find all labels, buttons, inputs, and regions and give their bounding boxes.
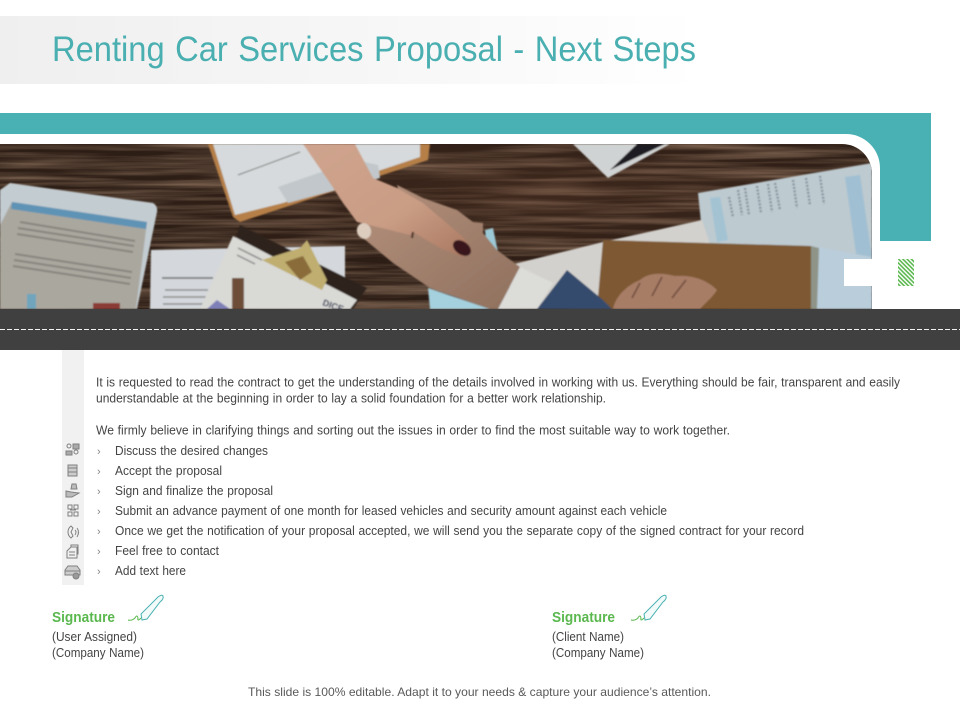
white note box (844, 259, 872, 286)
signature block: client: (Company Name) (552, 646, 644, 660)
next steps list (97, 444, 804, 578)
woman's arm (303, 144, 472, 257)
jacket sleeve (537, 270, 612, 309)
icon: grid (68, 505, 78, 516)
icon: hand with money (66, 484, 79, 497)
shirt cuff (498, 267, 553, 309)
next steps list: Discuss the desired changes (115, 444, 268, 458)
top clipboard (208, 144, 430, 222)
signature block: user (52, 595, 163, 660)
intro paragraph (96, 376, 901, 406)
next steps list: Once we get the notification of your proposal accepted, we will send you the separate copy of the signed contract for your record (115, 524, 804, 538)
icon: car (65, 566, 80, 579)
next steps list: Accept the proposal (115, 464, 222, 478)
icon: pen with squiggle (128, 595, 163, 620)
signature block: client: (Client Name) (552, 630, 624, 644)
next steps list: › (97, 546, 101, 558)
belief statement: We firmly believe in clarifying things and sorting out the issues in order to find the most suitable way to work together. (96, 424, 730, 438)
invoice clipboard (225, 225, 367, 309)
document stack (150, 246, 345, 309)
signature block: client (552, 595, 666, 660)
signature block: client: Signature (552, 609, 615, 626)
signature block: user: (User Assigned) (52, 630, 137, 644)
signature block: user: (Company Name) (52, 646, 144, 660)
teal frame (0, 113, 931, 241)
icon: document (68, 465, 77, 476)
spreadsheet (697, 162, 872, 256)
painted nail (452, 239, 472, 257)
next steps list: Sign and finalize the proposal (115, 484, 273, 498)
tablet (0, 183, 157, 309)
icon: documents (67, 545, 78, 558)
icon: phone (68, 526, 78, 538)
white sheet (510, 220, 712, 309)
icon: people and chart (66, 444, 79, 455)
green hatched square (898, 259, 914, 286)
next steps list: › (97, 466, 101, 478)
dark divider band (0, 309, 960, 350)
next steps list: Feel free to contact (115, 544, 219, 558)
blue card (428, 288, 490, 309)
next steps list: › (97, 446, 101, 458)
next steps list: Submit an advance payment of one month for leased vehicles and security amount against each vehicle (115, 504, 667, 518)
intro paragraph: It is requested to read the contract to get the understanding of the details involved in working with us. Everything should be fair, transparent and easily (96, 376, 901, 390)
photo: handshake over documents on a desk: DICE (321, 297, 345, 314)
signature block: user: Signature (52, 609, 115, 626)
hand on folder (613, 274, 717, 309)
photo: handshake over documents on a desk (0, 144, 872, 314)
man's hand (357, 185, 520, 309)
title band (0, 16, 700, 84)
next steps list: › (97, 526, 101, 538)
next steps list: › (97, 506, 101, 518)
icon strip (62, 350, 84, 585)
newspaper (573, 144, 670, 178)
next steps list: Add text here (115, 564, 186, 578)
next steps list: › (97, 566, 101, 578)
thumb nail (356, 222, 372, 240)
next steps list: › (97, 486, 101, 498)
footer note: This slide is 100% editable. Adapt it to your needs & capture your audience’s attention. (248, 685, 711, 699)
intro paragraph: understandable at the beginning in order to lay a solid foundation for a better work relationship. (96, 392, 606, 406)
icon: pen with squiggle (631, 595, 666, 620)
brown folder (597, 240, 815, 309)
title: Renting Car Services Proposal - Next Steps (52, 30, 696, 69)
